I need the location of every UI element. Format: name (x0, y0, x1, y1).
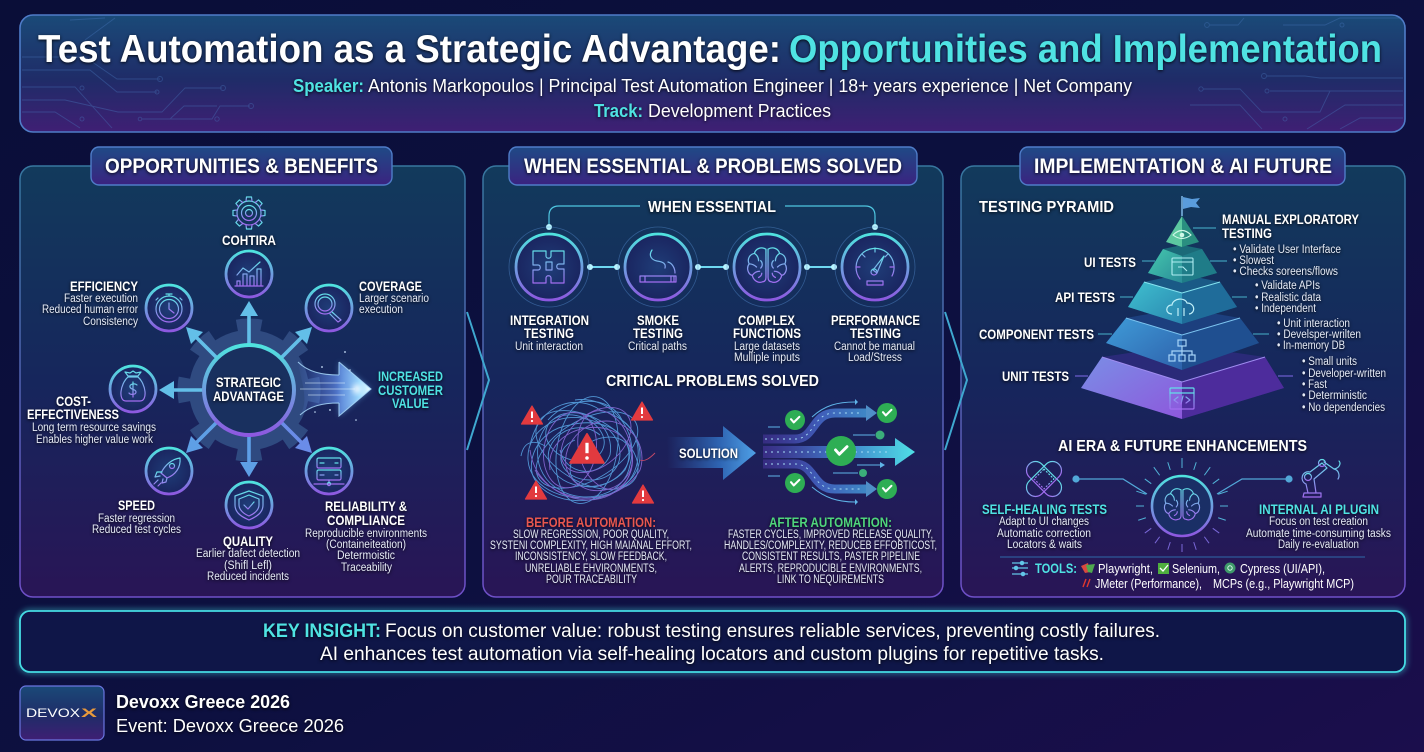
footer event text: Devoxx Greece 2026 (116, 692, 290, 712)
header banner (20, 15, 1405, 132)
panel heading pill: WHEN ESSENTIAL & PROBLEMS SOLVED (524, 155, 902, 178)
text: complex functions: Large datasets (734, 341, 800, 353)
text: before automation: INCONSISTENCY, SLOW FEEDBACK, (515, 551, 667, 563)
icon: large check (826, 436, 856, 466)
text: reliability: Reproducible environments (305, 528, 427, 540)
text: speed (92, 498, 181, 536)
heading: when essential: WHEN ESSENTIAL (648, 199, 776, 216)
icon: warning top right (632, 402, 652, 420)
icon: check one (785, 410, 805, 430)
label: increased customer value: INCREASED (378, 368, 443, 384)
icon: robot arm (1302, 460, 1340, 497)
text: quality: QUALITY (223, 534, 273, 549)
node: performance testing gauge (835, 227, 915, 307)
notes: unit tests (1302, 356, 1386, 414)
notes: API tests: • Validate APIs (1255, 280, 1320, 292)
icon: warning top left (522, 406, 542, 424)
layer: UI tests (1148, 245, 1217, 283)
text: before automation (490, 514, 692, 586)
icon: sliders (1012, 561, 1028, 576)
panel: when essential and problems solved (483, 147, 943, 597)
title (38, 28, 1382, 71)
callout: key insight: Focus on customer value: robust testing ensures reliable services, preventing costly failures. (385, 621, 1160, 642)
text: smoke testing: Critical paths (628, 341, 687, 353)
callout: key insight (20, 611, 1405, 672)
notes: API tests: • Realistic data (1255, 292, 1322, 304)
notes: UI tests: • Slowest (1233, 255, 1275, 267)
icon: cypress (1224, 562, 1236, 574)
icon: check two (785, 473, 805, 493)
radiating arrows (159, 301, 312, 477)
label: UI tests: UI TESTS (1084, 255, 1136, 270)
text: smoke testing: TESTING (633, 326, 683, 341)
icon: gear at top (233, 197, 265, 229)
panel: implementation and AI future (961, 147, 1405, 597)
footer event text: Event: Devoxx Greece 2026 (116, 716, 344, 736)
text: efficiency: EFFICIENCY (70, 279, 138, 294)
logo: Devoxx: X (81, 708, 98, 720)
arrow: to customer value (298, 351, 371, 421)
text: internal AI plugin (1246, 501, 1391, 551)
icon: check four (877, 479, 897, 499)
node: integration testing puzzle (509, 227, 589, 307)
node: smoke testing cigarette (618, 227, 698, 307)
text: coverage: Larger scenario (359, 293, 429, 305)
notes: UI tests (1233, 244, 1341, 278)
title: Opportunities and Implementation (789, 28, 1382, 71)
panel heading pill (91, 147, 392, 185)
text: self-healing tests (982, 501, 1107, 551)
icon: central warning (570, 434, 604, 463)
text: integration testing: INTEGRATION (510, 313, 589, 328)
text: integration testing: Unit interaction (515, 341, 583, 353)
heading: critical problems solved: CRITICAL PROBLEMS SOLVED (606, 373, 819, 390)
text: after automation: LINK TO NEQUIREMENTS (777, 574, 884, 586)
leader lines (1075, 228, 1293, 376)
text: before automation: SLOW REGRESSION, POOR QUALITY, (513, 529, 669, 541)
callout: key insight: KEY INSIGHT: (263, 621, 381, 642)
speaker line: Antonis Markopoulos | Principal Test Automation Engineer | 18+ years experience | Net Company (368, 76, 1132, 96)
layer: component tests (1106, 308, 1259, 370)
connectors to AI brain (1073, 476, 1292, 494)
title: Test Automation as a Strategic Advantage: (38, 28, 781, 71)
label: component tests: COMPONENT TESTS (979, 327, 1094, 342)
text: reliability: Traceability (341, 562, 392, 574)
text: self-healing tests: SELF-HEALING TESTS (982, 501, 1107, 517)
tools row (1012, 560, 1354, 591)
notes: unit tests: • No dependencies (1302, 402, 1385, 414)
icon: warning bottom right (632, 485, 654, 503)
text: quality: Earlier dafect detection (196, 548, 300, 560)
layer: API tests (1128, 274, 1237, 324)
illustration: tangled scribble (521, 392, 655, 508)
text: performance testing: Cannot be manual (834, 341, 915, 353)
text: coverage: execution (359, 304, 403, 316)
text: efficiency: Faster execution (64, 293, 138, 305)
chart: testing pyramid (1081, 196, 1284, 419)
text: before automation: SYSTENI COMPLEXITY, HIGH MAIANAL EFFORT, (490, 540, 692, 552)
tools row: Playwright, (1098, 562, 1153, 576)
track line: Development Practices (648, 101, 831, 121)
arrow: chevron between panels two and three (945, 312, 967, 450)
label: unit tests: UNIT TESTS (1002, 369, 1069, 384)
track line: Track: (594, 101, 643, 121)
text: smoke testing: SMOKE (637, 313, 679, 328)
text: quality: (Shifl Lefl) (224, 560, 272, 572)
text: before automation: UNRELIABLE EHVIRONMENTS, (525, 563, 657, 575)
text: after automation: CONSISTENT RESULTS, PASTER PIPELINE (742, 551, 920, 563)
notes: UI tests: • Checks soreens/flows (1233, 266, 1338, 278)
panel heading pill: IMPLEMENTATION & AI FUTURE (1034, 155, 1332, 178)
text: quality (196, 534, 300, 583)
text: performance testing: TESTING (850, 326, 901, 341)
text: self-healing tests: Locators & waits (1007, 539, 1082, 551)
text: coverage (359, 279, 429, 316)
text: reliability: COMPLIANCE (327, 513, 405, 528)
callout: key insight: AI enhances test automation via self-healing locators and custom plugins for repetitive tasks. (320, 644, 1104, 665)
node: quality (226, 482, 272, 528)
text: before automation: BEFORE AUTOMATION: (526, 514, 656, 530)
text: complex functions: FUNCTIONS (733, 326, 801, 341)
heading: testing pyramid: TESTING PYRAMID (979, 199, 1114, 216)
tools row: TOOLS: (1035, 560, 1077, 576)
label: API tests: API TESTS (1055, 290, 1115, 305)
text: internal AI plugin: Focus on test creation (1269, 516, 1368, 528)
text: after automation (724, 514, 937, 586)
text: integration testing: TESTING (524, 326, 574, 341)
text: self-healing tests: Adapt to UI changes (999, 516, 1089, 528)
text: speed: Faster regression (98, 513, 175, 525)
layer: manual exploratory (1166, 216, 1199, 247)
notes: component tests (1277, 318, 1361, 352)
label: increased customer value: VALUE (392, 395, 429, 411)
text: after automation: ALERTS, REPRODUCIBLE ENVIRONMENTS, (739, 563, 922, 575)
text: coverage: COVERAGE (359, 279, 422, 294)
icon: selenium (1158, 563, 1169, 574)
text: reliability: (Containeiteation) (326, 539, 406, 551)
circuit decoration (22, 18, 1403, 129)
panel: opportunities and benefits (20, 147, 465, 597)
arrow: solution: SOLUTION (679, 445, 738, 461)
hub gear (185, 326, 313, 454)
hub circle: strategic advantage (204, 345, 294, 435)
tools row: Cypress (UI/API), (1240, 562, 1325, 576)
text: smoke testing (628, 313, 687, 353)
text: complex functions (733, 313, 801, 364)
layer: unit tests (1081, 345, 1284, 419)
notes: unit tests: • Deterministic (1302, 390, 1367, 402)
icon: playwright (1081, 563, 1095, 573)
node: cost-effectiveness (110, 366, 156, 412)
footer event text (116, 692, 344, 736)
text: reliability: RELIABILITY & (325, 499, 407, 514)
node: speed (146, 448, 192, 494)
text: after automation: FASTER CYCLES, IMPROVED RELEASE QUALITY, (728, 529, 933, 541)
heading: AI era: AI ERA & FUTURE ENHANCEMENTS (1058, 438, 1307, 455)
text: performance testing: Load/Stress (848, 352, 902, 364)
text: speed: SPEED (118, 498, 155, 513)
icon: AI brain with rays (1136, 458, 1228, 552)
text: self-healing tests: Automatic correction (997, 528, 1091, 540)
text: integration testing (510, 313, 589, 353)
arrow: solution (667, 426, 756, 480)
text: cost-effectiveness: COST- (56, 394, 91, 409)
text: speed: Reduced test cycles (92, 524, 181, 536)
hub circle: strategic advantage: STRATEGIC (216, 374, 281, 390)
notes: unit tests: • Fast (1302, 379, 1328, 391)
notes: component tests: • Develsper-wrilten (1277, 329, 1361, 341)
text: after automation: AFTER AUTOMATION: (769, 514, 892, 530)
icon: check three (877, 403, 897, 423)
text: quality: Reduced incidents (207, 571, 289, 583)
icon: jmeter (1083, 579, 1090, 587)
text: complex functions: Mulliple inputs (734, 352, 800, 364)
text: complex functions: COMPLEX (738, 313, 795, 328)
text: cost-effectiveness (27, 394, 156, 446)
text: internal AI plugin: Daily re-evaluation (1278, 539, 1359, 551)
label: increased customer value (378, 368, 443, 411)
text: efficiency: Reduced human error (42, 304, 138, 316)
tools row: JMeter (Performance), (1095, 577, 1202, 591)
logo: Devoxx: DEVOX (26, 708, 80, 720)
text: internal AI plugin: INTERNAL AI PLUGIN (1259, 501, 1379, 517)
text: cost-effectiveness: Enables higher value work (36, 434, 153, 446)
speaker line: Speaker: (293, 76, 364, 96)
panel heading pill (509, 147, 917, 185)
text: performance testing (831, 313, 920, 364)
text: after automation: HANDLES/COMPLEXITY, REDUCEB EFFOBTICOST, (724, 540, 937, 552)
text: before automation: POUR TRACEABILITY (546, 574, 637, 586)
notes: API tests: • Independent (1255, 303, 1317, 315)
arrow: chevron between panels one and two (467, 312, 489, 450)
notes: component tests: • In-memory DB (1277, 340, 1345, 352)
text: reliability: Determoistic (337, 550, 395, 562)
node: growth chart (226, 251, 272, 297)
icon: warning bottom left (526, 481, 546, 499)
node: efficiency (146, 285, 192, 331)
notes: UI tests: • Validate User Interface (1233, 244, 1341, 256)
panel heading pill (1020, 147, 1345, 185)
label: manual exploratory testing: MANUAL EXPLORATORY (1222, 212, 1359, 227)
label: top node: COHTIRA (222, 233, 276, 248)
label: manual exploratory testing (1222, 212, 1359, 241)
text: cost-effectiveness: EFFECTIVENESS (27, 407, 119, 422)
notes: API tests (1255, 280, 1322, 315)
hub circle: strategic advantage: ADVANTAGE (213, 388, 284, 404)
node: coverage (306, 285, 352, 331)
text: efficiency (42, 279, 138, 328)
notes: component tests: • Unit interaction (1277, 318, 1350, 330)
panel heading pill: OPPORTUNITIES & BENEFITS (105, 155, 378, 178)
node: complex functions brain (727, 227, 807, 307)
illustration: organized streams (763, 399, 915, 505)
tools row: Selenium, (1172, 562, 1220, 576)
text: internal AI plugin: Automate time-consuming tasks (1246, 528, 1391, 540)
icon: flag (1182, 196, 1200, 216)
label: manual exploratory testing: TESTING (1222, 226, 1272, 241)
node: reliability (306, 448, 352, 494)
logo: Devoxx (20, 686, 104, 740)
text: performance testing: PERFORMANCE (831, 313, 920, 328)
connector lines (546, 206, 878, 270)
label: increased customer value: CUSTOMER (378, 382, 443, 398)
icon: bandage (1023, 458, 1065, 500)
tools row: MCPs (e.g., Playwright MCP) (1213, 577, 1354, 591)
notes: unit tests: • Small units (1302, 356, 1357, 368)
text: efficiency: Consistency (83, 316, 138, 328)
text: reliability (305, 499, 427, 574)
notes: unit tests: • Developer-written (1302, 368, 1386, 380)
text: cost-effectiveness: Long term resource savings (32, 422, 156, 434)
